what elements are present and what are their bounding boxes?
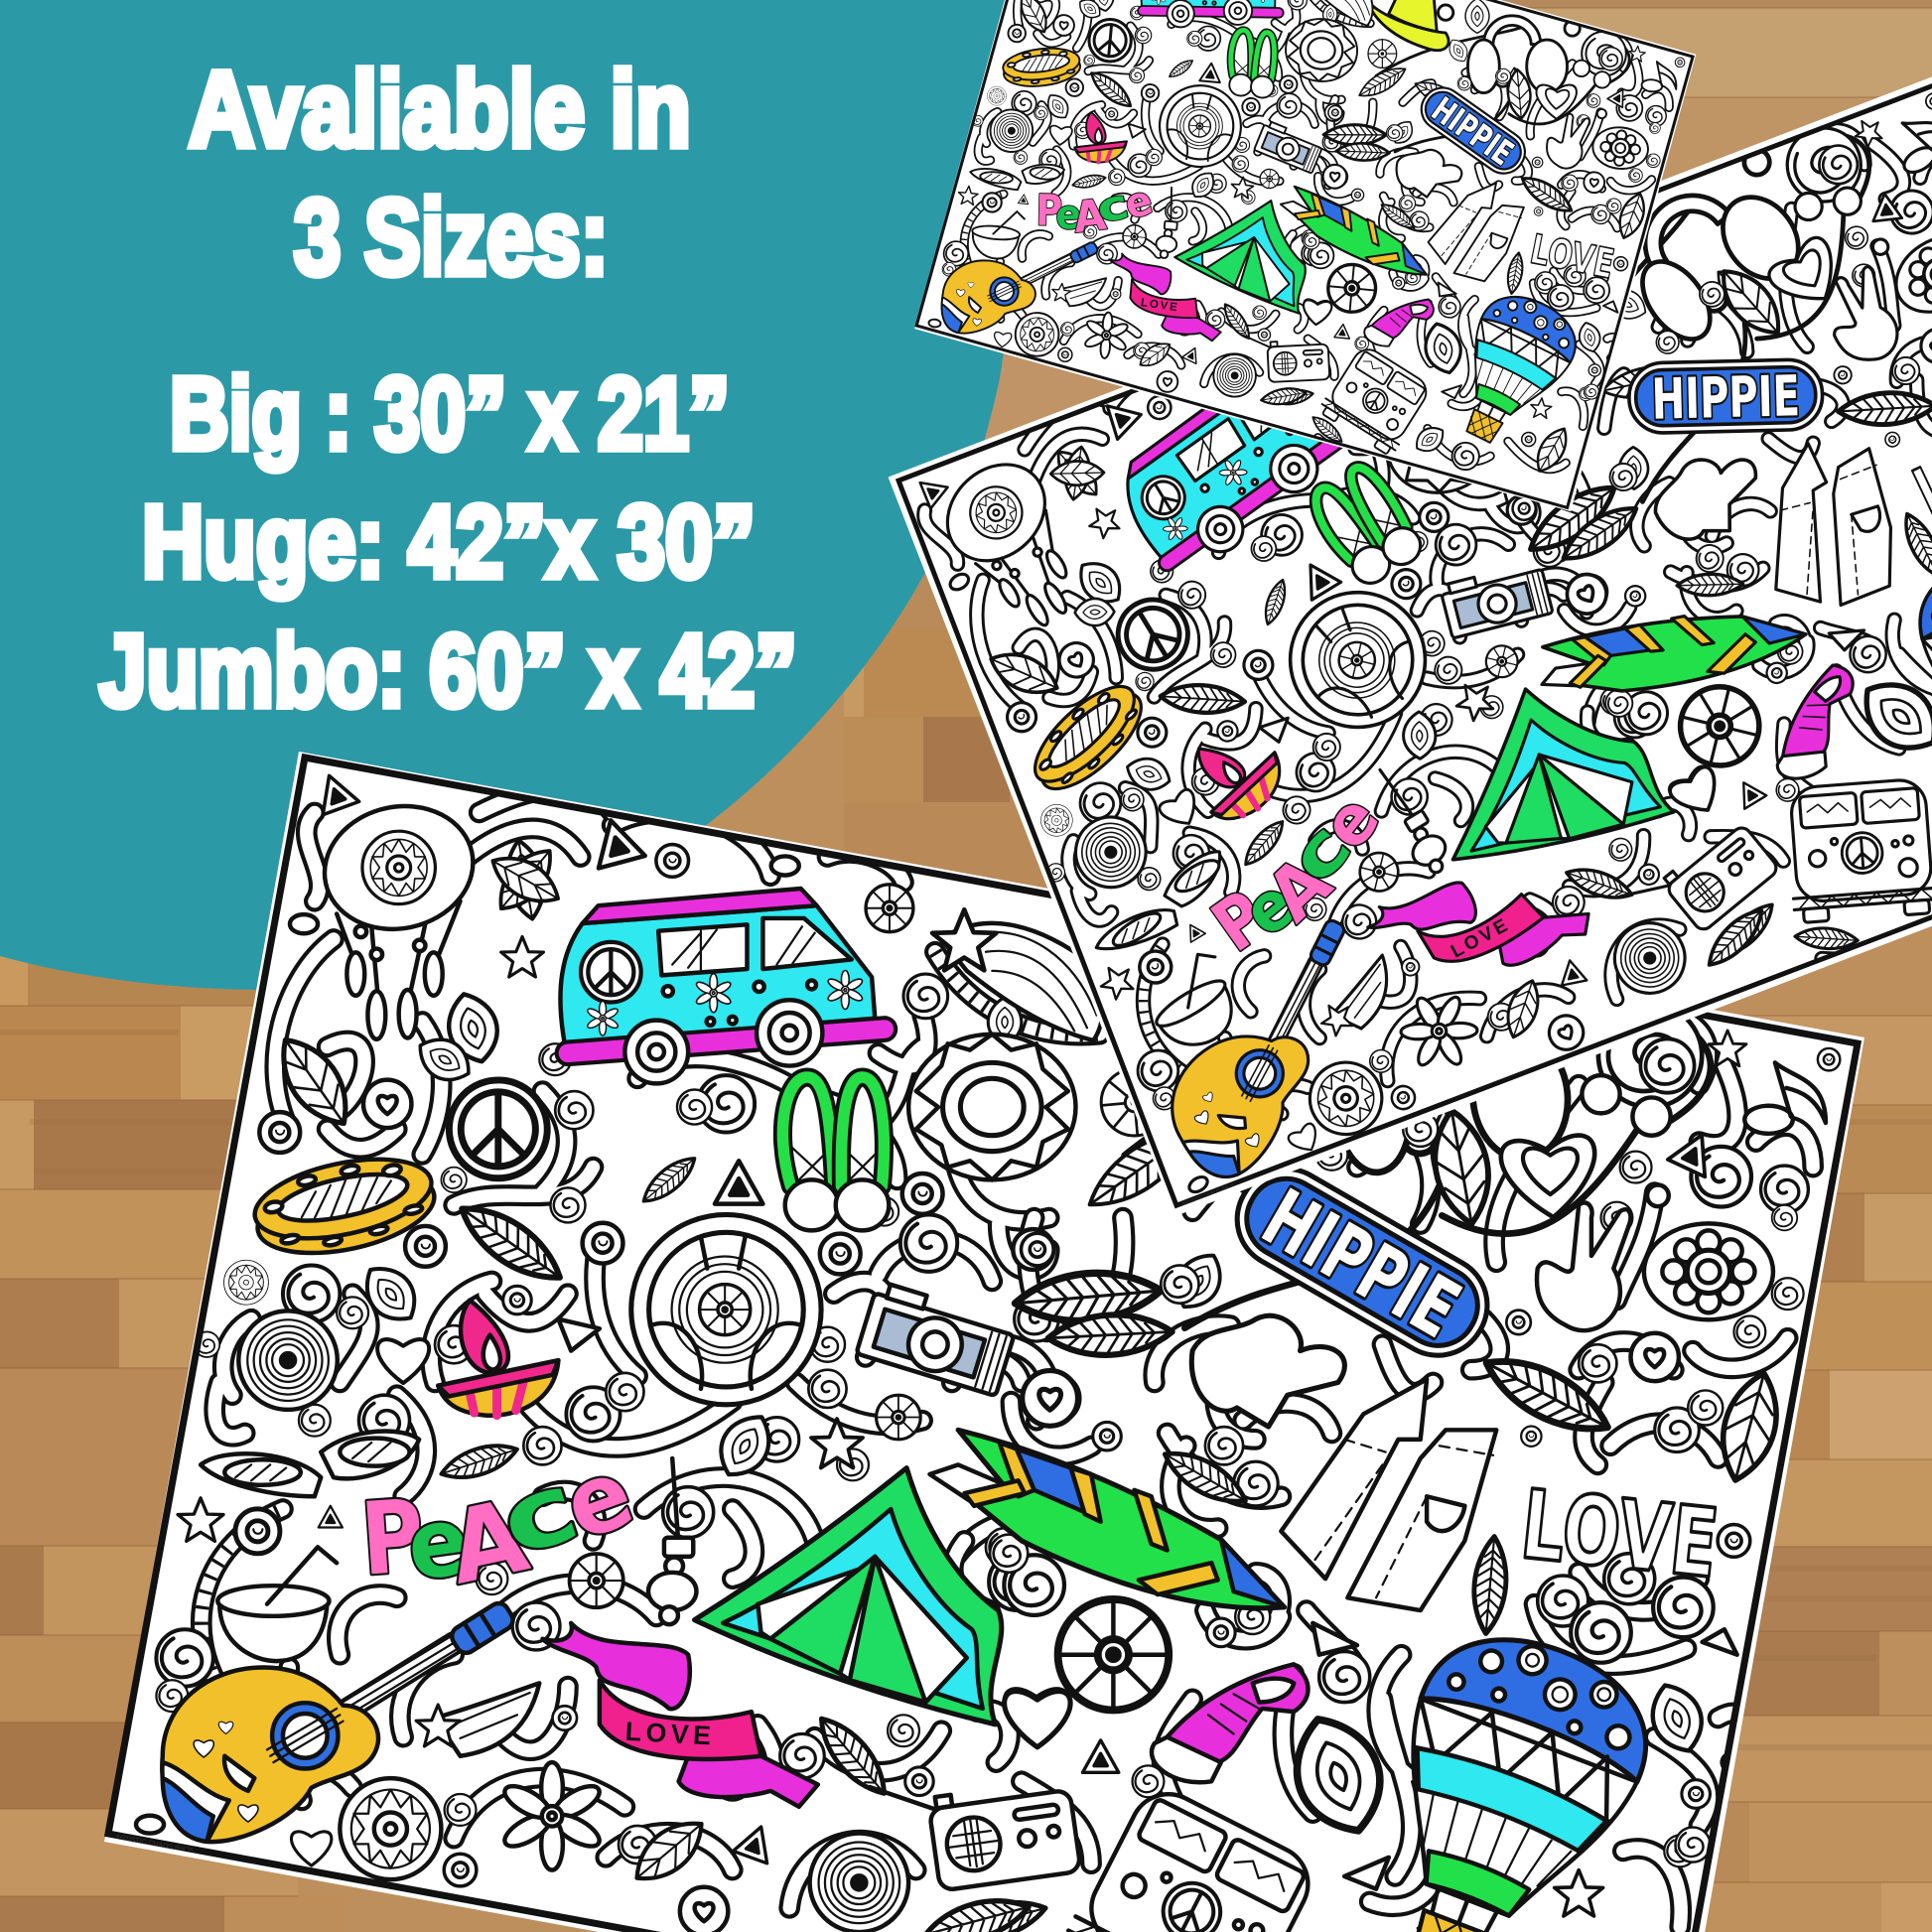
doodle background tubes xyxy=(202,788,1813,1932)
heading and size list xyxy=(99,49,797,728)
HIPPIE badge: HIPPIE xyxy=(1248,1172,1475,1356)
icon: flip flop cloud xyxy=(1191,1315,1344,1427)
poster: Big top sheet xyxy=(903,0,1707,519)
icon: peace sign xyxy=(449,1080,547,1178)
LOVE banner, colored: LOVE xyxy=(624,1717,716,1751)
teal circle background xyxy=(0,0,1007,990)
tent, colored xyxy=(695,1468,1002,1725)
tambourine, colored xyxy=(248,1146,442,1267)
icon: shooting star xyxy=(416,1683,539,1756)
icon: bead string xyxy=(648,1458,696,1624)
poster: Jumbo front sheet xyxy=(104,752,1864,1932)
icon: radio xyxy=(870,1759,1081,1898)
icon: sunglasses xyxy=(201,1431,419,1496)
bottom van xyxy=(1060,1778,1326,1932)
icon: steering wheel xyxy=(631,1214,821,1405)
icon: coconut cup xyxy=(217,1547,337,1661)
icon: shooting star with fan leaves xyxy=(932,909,1103,1040)
icon: denim vest xyxy=(1281,1379,1496,1610)
hot air balloon, colored xyxy=(1330,1610,1671,1932)
size: Jumbo: Jumbo: 60” x 42” xyxy=(99,614,797,728)
icon: sun mandala xyxy=(908,1035,1075,1179)
guitar, colored xyxy=(162,1599,516,1842)
PEACE lettering: e xyxy=(400,1484,477,1602)
icon: music note xyxy=(1744,1062,1826,1134)
PEACE lettering xyxy=(357,1437,646,1607)
size: Huge: Huge: 42”x 30” xyxy=(142,484,756,599)
doodles: right side xyxy=(921,1031,1840,1932)
PEACE lettering: e xyxy=(550,1437,646,1563)
hidden corner doodles: visible only on smaller sheets xyxy=(1057,896,1730,1336)
van, colored xyxy=(560,889,885,1083)
LOVE outlined lettering: LOVE xyxy=(1516,1468,1724,1599)
PEACE lettering: P xyxy=(357,1477,428,1598)
doodles: left and centre xyxy=(136,769,1164,1932)
icon: dreamcatcher xyxy=(313,792,484,1039)
PEACE lettering: c xyxy=(487,1450,591,1579)
surfboard feather, colored xyxy=(929,1430,1285,1608)
icon: flower ring xyxy=(1644,1223,1773,1319)
icon: peace hand xyxy=(1537,1202,1630,1330)
poster: Huge middle sheet xyxy=(774,0,1932,1385)
HIPPIE badge xyxy=(1219,1152,1505,1373)
poster frame xyxy=(108,758,1858,1932)
LOVE banner, colored xyxy=(542,1623,818,1807)
heading: Avaliable in: Avaliable in xyxy=(189,49,691,169)
oil lamp, colored xyxy=(438,1301,558,1416)
PEACE lettering: A xyxy=(438,1476,537,1607)
icon: yellow hat xyxy=(1373,0,1450,52)
icon: camera xyxy=(856,1281,1018,1396)
heading: 3 Sizes: 3 Sizes: xyxy=(294,177,609,297)
sneaker, colored xyxy=(1152,1664,1309,1782)
size: Big: Big : 30” x 21” xyxy=(170,356,730,471)
brand credit: ARTISTIC CHAOS INK™ xyxy=(115,1834,194,1855)
green shoes, colored xyxy=(782,1077,889,1230)
